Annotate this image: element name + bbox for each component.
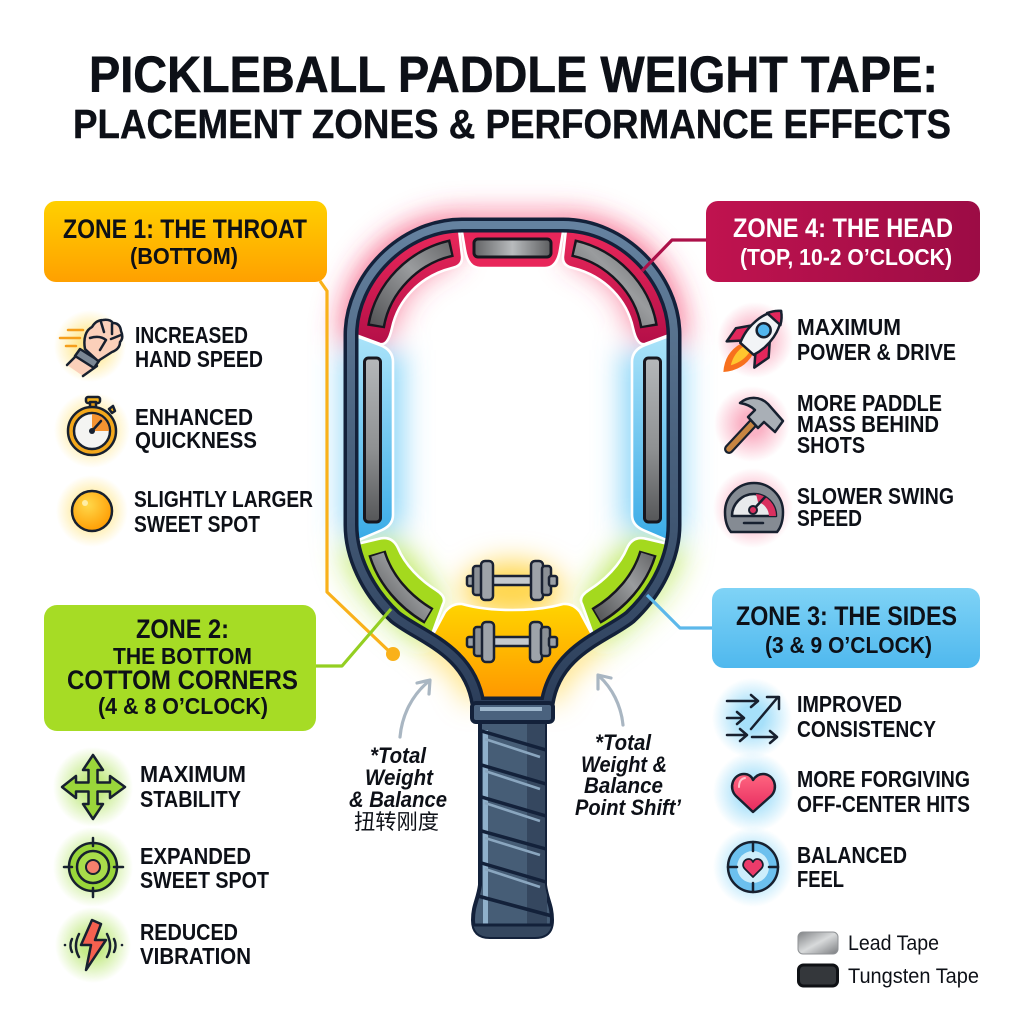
panel: zone 1 header	[44, 201, 327, 282]
tape: side left	[364, 358, 380, 522]
annotation: right total weight: Balance	[584, 773, 663, 798]
benefit: reduced vibration	[55, 907, 251, 983]
annotation: left total weight: 扭转刚度	[354, 811, 439, 834]
tape: corner left	[377, 553, 429, 616]
icon: heart target	[713, 827, 793, 907]
icon: arrows	[712, 678, 792, 758]
text: HAND SPEED	[135, 346, 263, 372]
text: SWEET SPOT	[134, 511, 260, 537]
text	[797, 314, 956, 365]
text: BALANCED	[797, 842, 907, 868]
text	[140, 843, 269, 893]
icon: heart	[713, 752, 793, 832]
text: POWER & DRIVE	[797, 339, 956, 365]
annotation: right total weight	[575, 730, 682, 820]
text: EXPANDED	[140, 843, 251, 869]
text: SHOTS	[797, 432, 865, 458]
tape: corner right	[596, 553, 648, 616]
annotation: left total weight: & Balance	[349, 787, 447, 812]
text	[135, 322, 263, 372]
panel: zone 3 header: ZONE 3: THE SIDES	[736, 601, 957, 631]
icon: stopwatch	[54, 392, 130, 468]
panel: zone 4 header: (TOP, 10-2 O’CLOCK)	[740, 244, 952, 270]
legend: lead tape: Lead Tape	[848, 932, 939, 955]
icon: rocket	[709, 296, 797, 388]
paddle handle	[470, 703, 555, 940]
tape: head right	[573, 248, 649, 327]
text	[140, 919, 251, 969]
annotation: left total weight: *Total	[370, 743, 427, 768]
arrow: left annotation	[400, 680, 430, 737]
text: MASS BEHIND	[797, 411, 939, 437]
benefit: slightly larger sweet spot	[56, 475, 313, 547]
text: MORE PADDLE	[797, 390, 942, 416]
benefit: slower swing speed	[713, 468, 954, 548]
icon: hammer	[714, 386, 790, 462]
text: MAXIMUM	[797, 314, 901, 340]
benefit: balanced feel	[713, 827, 907, 907]
paddle head	[340, 220, 685, 720]
connector: zone 4	[642, 240, 706, 271]
title: PLACEMENT ZONES & PERFORMANCE EFFECTS	[73, 101, 951, 147]
title	[73, 46, 951, 147]
text: REDUCED	[140, 919, 238, 945]
text	[797, 842, 907, 892]
annotation: left total weight: Weight	[365, 765, 435, 790]
benefit: improved consistency	[712, 678, 936, 758]
text: ENHANCED	[135, 404, 253, 430]
benefit: maximum stability	[53, 747, 246, 827]
title: PICKLEBALL PADDLE WEIGHT TAPE:	[89, 46, 938, 103]
text: SLIGHTLY LARGER	[134, 486, 313, 512]
frame	[351, 225, 674, 704]
text	[797, 766, 970, 817]
benefit: more paddle mass behind shots	[714, 386, 942, 462]
connector: zone 1	[320, 281, 393, 655]
panel: zone 2 header: ZONE 2:	[136, 614, 229, 644]
text: FEEL	[797, 866, 844, 892]
icon: ball	[56, 475, 128, 547]
paddle glow	[351, 225, 674, 700]
tape: head left	[376, 248, 452, 327]
panel: zone 1 header: (BOTTOM)	[130, 243, 238, 269]
text	[135, 404, 257, 453]
icon: fist	[54, 310, 126, 382]
connector dot: zone 1	[386, 647, 400, 661]
text: SPEED	[797, 505, 862, 531]
annotation: left total weight	[349, 743, 447, 834]
benefit: more forgiving off-center hits	[713, 752, 970, 832]
icon: gauge	[713, 468, 793, 548]
text	[140, 761, 246, 812]
legend: lead tape	[798, 932, 939, 955]
legend: tungsten tape	[798, 965, 979, 988]
benefit: enhanced quickness	[54, 392, 257, 468]
text: IMPROVED	[797, 691, 902, 717]
annotation: right total weight: Weight &	[581, 752, 667, 777]
icon: target	[53, 827, 133, 907]
benefit: maximum power and drive	[709, 296, 956, 388]
tape: side right	[644, 358, 660, 522]
icon: lightning	[55, 907, 131, 983]
benefit: increased hand speed	[54, 310, 263, 382]
connector: zone 2	[316, 609, 391, 666]
panel: zone 1 header: ZONE 1: THE THROAT	[63, 214, 307, 244]
panel: zone 2 header	[44, 605, 316, 731]
panel: zone 4 header: ZONE 4: THE HEAD	[733, 213, 953, 243]
panel: zone 2 header: THE BOTTOM	[113, 643, 252, 669]
annotation: right total weight: Point Shift’	[575, 795, 682, 820]
text: MAXIMUM	[140, 761, 246, 787]
icon: upper dumbbell	[467, 561, 557, 600]
text: MORE FORGIVING	[797, 766, 970, 792]
text: SWEET SPOT	[140, 867, 269, 893]
tape: head top	[474, 239, 551, 257]
legend	[798, 932, 979, 988]
annotation: right total weight: *Total	[595, 730, 652, 755]
panel: zone 4 header	[706, 201, 980, 282]
icon: lower dumbbell	[467, 622, 557, 662]
panel: zone 3 header: (3 & 9 O’CLOCK)	[765, 632, 932, 658]
text: OFF-CENTER HITS	[797, 791, 970, 817]
arrow: right annotation	[598, 675, 623, 725]
connector: zone 3	[647, 595, 712, 628]
text: INCREASED	[135, 322, 248, 348]
text: CONSISTENCY	[797, 716, 936, 742]
benefit: expanded sweet spot	[53, 827, 269, 907]
text: STABILITY	[140, 786, 241, 812]
text: SLOWER SWING	[797, 483, 954, 509]
legend: tungsten tape: Tungsten Tape	[848, 965, 979, 988]
text	[134, 486, 313, 537]
icon: four-way arrows	[53, 747, 133, 827]
panel: zone 3 header	[712, 588, 980, 668]
zone fills	[358, 232, 666, 696]
text: VIBRATION	[140, 943, 251, 969]
text: QUICKNESS	[135, 427, 257, 453]
panel: zone 2 header: (4 & 8 O’CLOCK)	[98, 693, 268, 719]
text	[797, 691, 936, 742]
text	[797, 390, 942, 458]
panel: zone 2 header: COTTOM CORNERS	[67, 665, 298, 695]
text	[797, 483, 954, 531]
